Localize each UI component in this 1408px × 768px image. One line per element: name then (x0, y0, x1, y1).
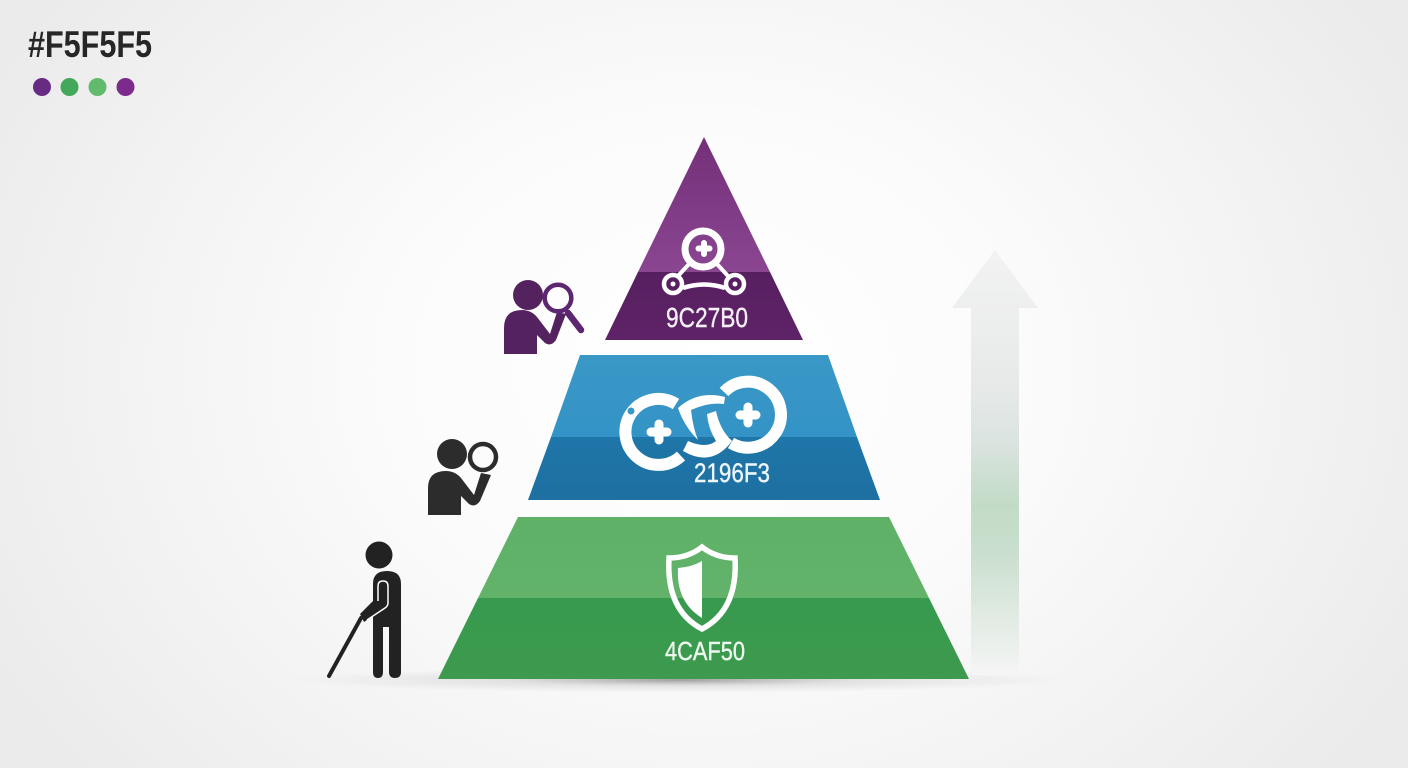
pyramid tier: bottom green (438, 517, 969, 679)
ground shadow (290, 667, 1070, 693)
icon: linked medical rings (625, 382, 781, 465)
icon: person with cane (329, 542, 401, 678)
icon: purple person with magnifier (504, 280, 581, 354)
icon: shield (669, 547, 735, 629)
label: 2196F3: 2196F3 (694, 458, 770, 488)
label: 4CAF50: 4CAF50 (665, 636, 745, 666)
icon: dark person with magnifier (428, 439, 496, 515)
palette dots (33, 78, 134, 96)
label: 9C27B0: 9C27B0 (666, 302, 748, 333)
pyramid tier: middle blue (528, 355, 880, 500)
icon: medical network (664, 231, 744, 293)
pyramid tier: top purple (605, 137, 803, 340)
rising arrow (952, 250, 1038, 675)
heading: background colour code: #F5F5F5 (28, 24, 152, 65)
